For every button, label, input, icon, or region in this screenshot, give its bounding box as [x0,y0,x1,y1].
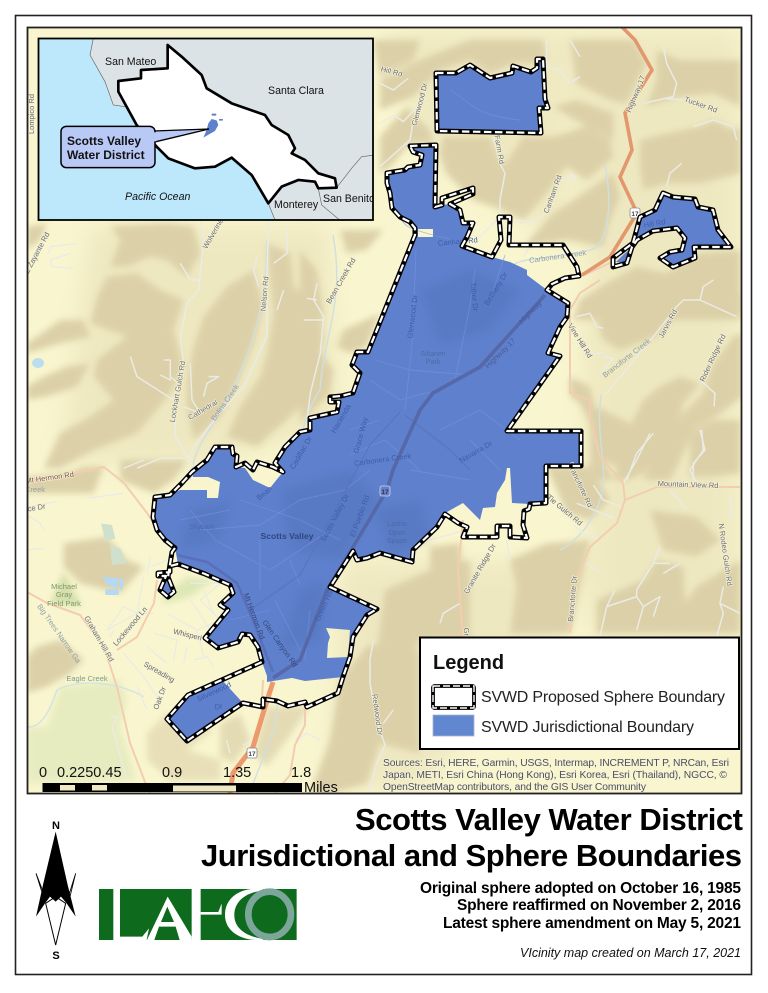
road labels outside district: N Rodeo Gulch Rd [717,523,734,586]
green open space areas [27,572,214,783]
place labels inside district: Open [388,530,406,537]
road labels outside district: Nelson Rd [259,276,271,312]
hillshade inside the district [180,270,520,650]
legend: proposed sphere boundary [433,686,725,708]
county outlines, neighbours [90,38,375,222]
road labels outside district: Redwood Dr [370,693,385,736]
scale bar: 0 [39,765,47,781]
legend: proposed sphere boundary: SVWD Proposed Sphere Boundary [481,689,725,706]
logo letter C [225,889,263,940]
road labels inside district: Glen Canyon Rd [260,618,300,669]
creek and park labels: Carbonera Creek [529,248,587,265]
road labels outside district: Bean Creek Rd [324,256,358,305]
logo letter F cutout [201,903,222,915]
callout label: Water District [67,148,145,162]
streets inside the district [180,90,520,660]
road labels outside district: Rider Ridge Rd [698,333,728,383]
SVWD jurisdictional boundary: blue fill [153,59,731,741]
road labels inside district: Hacienda [329,402,353,435]
road labels inside district: Green Hills [313,585,337,623]
highway shields: 17 [381,489,389,496]
creek and park labels: Eagle Creek [66,674,108,683]
adoption dates [420,880,741,932]
place labels inside district: Skypark [189,524,215,531]
road labels outside district: Oak Dr [151,685,168,711]
scale bar: 1.8 [291,765,311,781]
road labels outside district: Lockewood Ln [111,605,149,648]
road labels outside district: Cathedral [186,398,219,422]
road labels inside district [195,217,666,712]
callout box [61,126,155,168]
highway shields [247,208,640,758]
road labels outside district: Wolverine [201,217,225,250]
road labels outside district: Highway 17 [624,74,647,114]
road labels outside district: Graham Hill Rd [82,614,116,663]
logo letter L cutout [120,928,149,940]
scale bar: 0.2250.45 [57,765,122,781]
place labels inside district: Ladrio [387,521,407,528]
road labels inside district: Tabor Dr [469,282,480,312]
map frame [28,28,742,794]
creek and park labels: Big Trees Narrow Ga [35,602,83,666]
place labels inside district: Space [387,538,407,545]
scale bar: 1.35 [223,765,251,781]
logo letter O [248,892,291,937]
road labels outside district: Lompico Rd [27,94,36,134]
road labels outside district: Jarvis Rd [656,308,679,340]
inset vicinity map [38,38,375,222]
place labels inside district: Scotts Valley [260,531,314,541]
north arrow: N [52,820,60,832]
highway shields: 17 [631,211,639,218]
road labels inside district: Dr [214,701,224,712]
Pacific Ocean [40,38,276,222]
adoption dates: Latest sphere amendment on May 5, 2021 [443,915,741,932]
road labels outside district: Mt Hermon Rd [25,470,74,485]
Santa Cruz County [118,45,337,203]
title: Jurisdictional and Sphere Boundaries [201,838,742,873]
road labels inside district: Highway 17 [483,336,517,370]
road labels inside district: Hill Rd [643,217,666,230]
creek and park labels: Branciforte Creek [601,336,652,380]
water bodies and creeks [27,165,609,793]
callout label [67,136,144,159]
inset labels: San Mateo [105,56,156,68]
adoption dates: Original sphere adopted on October 16, 1985 [420,880,741,897]
scale bar: Miles [304,780,338,796]
Highway 17 north of district [582,27,652,275]
road labels inside district: Silverwood [195,680,232,704]
callout pointer [153,129,209,142]
inset labels: San Benito [323,193,375,205]
road labels inside district: Scotts Valley Dr [318,492,351,543]
SVWD proposed sphere boundary: black and white dashed line [153,59,731,741]
road labels inside district: Glenwood Dr [405,294,420,339]
data sources attribution: Sources: Esri, HERE, Garmin, USGS, Intermap, INCREMENT P, NRCan, Esri [383,758,729,769]
legend [420,638,739,749]
local white roads [27,40,740,793]
vicinity map note: VIcinity map created on March 17, 2021 [520,946,741,960]
road labels outside district: E Zayante Rd [22,230,52,275]
legend: jurisdictional boundary: SVWD Jurisdictional Boundary [481,719,694,736]
road labels outside district: Tie Gulch Rd [545,493,584,528]
legend: jurisdictional boundary [433,715,694,736]
adoption dates: Sphere reaffirmed on November 2, 2016 [457,897,741,914]
road labels inside district: Grace Way [351,416,370,455]
north arrow [36,820,76,962]
road labels inside district: Bean [255,484,274,502]
creek and park labels: Creek [25,485,45,494]
road labels outside district: Whisperi [172,627,203,643]
creek and park labels [25,248,652,683]
road labels outside district: Mountain View Rd [658,479,719,490]
title: Scotts Valley Water District [355,802,743,837]
road labels outside district: Lockhart Gulch Rd [168,360,187,423]
highway shields: 17 [248,751,256,758]
place labels inside district: Siltanen [420,351,446,358]
road labels outside district: ce Dr [27,501,47,514]
road labels outside district: Spreading [142,659,176,684]
data sources attribution: OpenStreetMap contributors, and the GIS User Community [383,782,647,793]
map: terrain, roads and district boundaries [22,27,742,796]
creek and park labels: Michael [51,582,77,591]
logo letter A [147,897,192,940]
road labels outside district [22,64,734,736]
road labels outside district: Canham Rd [542,174,564,214]
road labels inside district: Canham Rd [437,235,478,248]
road labels inside district: Carbonera Creek [354,451,412,468]
Mt Hermon Rd in the district [177,555,273,672]
road labels outside district: Glenwood Dr [410,82,430,127]
road labels inside district: Navarra Dr [458,439,494,465]
arterial roads (salmon) [27,240,740,793]
inset labels: Santa Clara [268,85,324,97]
scale bar: 0.9 [162,765,182,781]
inset labels [105,56,375,211]
legend title: Legend [433,652,504,674]
road labels inside district: Mt Hermon Rd [242,592,267,641]
inset labels: Monterey [274,199,319,211]
creek and park labels: Gray [56,590,72,599]
road labels outside district: Branciforte Dr [566,575,579,622]
creek and park labels: Bolins Creek [209,382,241,423]
streets: El Pueblo and Scotts Valley Dr [250,412,470,610]
road labels inside district: Cadillac Dr [288,434,314,471]
data sources attribution [383,758,729,793]
title [201,802,743,873]
road labels inside district: Bethany Dr [482,270,510,307]
data sources attribution: Japan, METI, Esri China (Hong Kong), Esri Korea, Esri (Thailand), NGCC, © [383,770,727,781]
inset labels: Pacific Ocean [125,191,190,203]
road labels outside district: Tucker Rd [683,95,719,115]
road labels inside district: Highway [517,299,544,326]
LAFCO logo [99,887,297,942]
creek and park labels: Field Park [47,599,81,608]
road labels outside district: Granite Ridge Dr [462,542,498,595]
road labels outside district: Branciforte Rd [566,461,594,509]
Highway 17 south of district [230,682,273,793]
place labels inside district [189,351,446,545]
north arrow: S [52,950,60,962]
callout label: Scotts Valley [67,134,141,148]
scale bar [40,767,338,792]
road labels outside district: Vine Hill Rd [566,322,594,360]
road labels outside district: Farm Rd [492,134,506,165]
place labels inside district: Park [426,359,441,366]
district locator [203,114,223,138]
Highway 17 through the district [273,295,545,678]
road labels inside district: El Pueblo Rd [348,494,371,538]
road labels outside district: Gr [462,627,471,637]
road labels outside district: Hill Rd [380,64,403,79]
